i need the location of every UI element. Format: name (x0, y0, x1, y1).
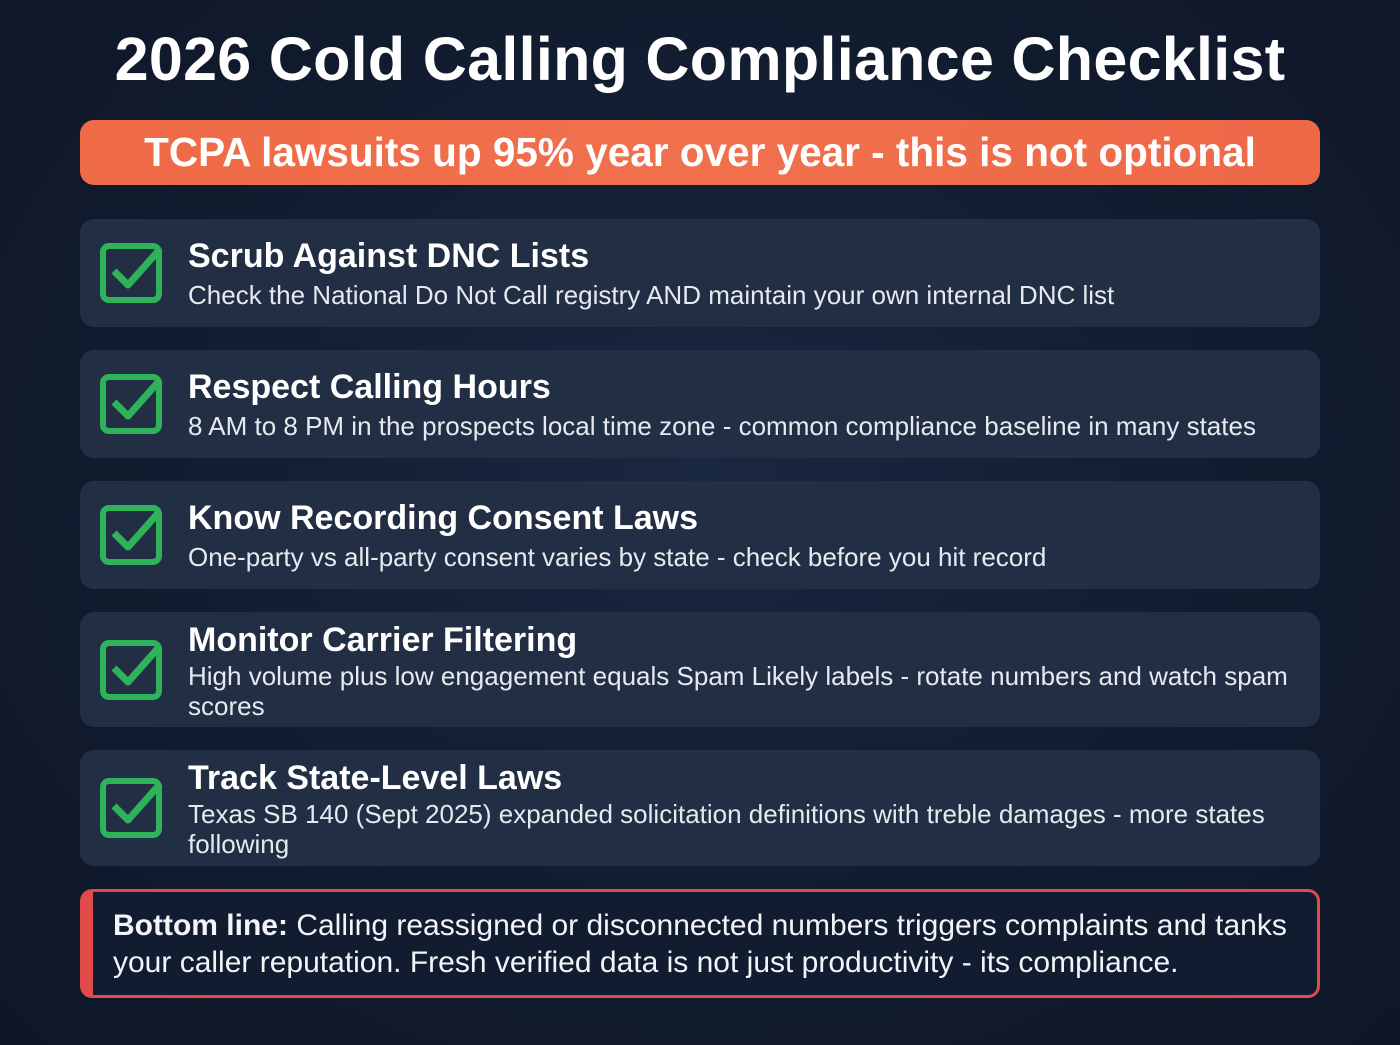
icon: checkbox (100, 640, 162, 700)
heading: Scrub Against DNC Lists (188, 237, 589, 275)
heading: Track State-Level Laws (188, 759, 562, 797)
title: 2026 Cold Calling Compliance Checklist (115, 25, 1285, 93)
card: carrier filtering (80, 612, 1320, 727)
text: High volume plus low engagement equals Spam Likely labels - rotate numbers and watch spam scores (188, 661, 1288, 721)
card: DNC lists (80, 219, 1320, 327)
text: Texas SB 140 (Sept 2025) expanded solicitation definitions with treble damages - more states following (188, 799, 1265, 859)
text: 8 AM to 8 PM in the prospects local time zone - common compliance baseline in many states (188, 411, 1256, 441)
heading: Know Recording Consent Laws (188, 499, 698, 537)
banner: warning (80, 120, 1320, 185)
callout: bottom line (80, 889, 1320, 998)
banner: warning: TCPA lawsuits up 95% year over year - this is not optional (144, 129, 1256, 175)
icon: checkbox (100, 778, 162, 838)
card: recording consent (80, 481, 1320, 589)
heading: Monitor Carrier Filtering (188, 621, 577, 659)
text: One-party vs all-party consent varies by state - check before you hit record (188, 542, 1046, 572)
card: calling hours (80, 350, 1320, 458)
card: state laws (80, 750, 1320, 866)
icon: checkbox (100, 505, 162, 565)
icon: checkbox (100, 243, 162, 303)
icon: checkbox (100, 374, 162, 434)
text: Check the National Do Not Call registry AND maintain your own internal DNC list (188, 280, 1114, 310)
callout: bottom line: Bottom line: Calling reassigned or disconnected numbers triggers complaints and tanks your caller reputation. Fresh verified data is not just productivity - its compliance. (113, 909, 1287, 979)
heading: Respect Calling Hours (188, 368, 551, 406)
